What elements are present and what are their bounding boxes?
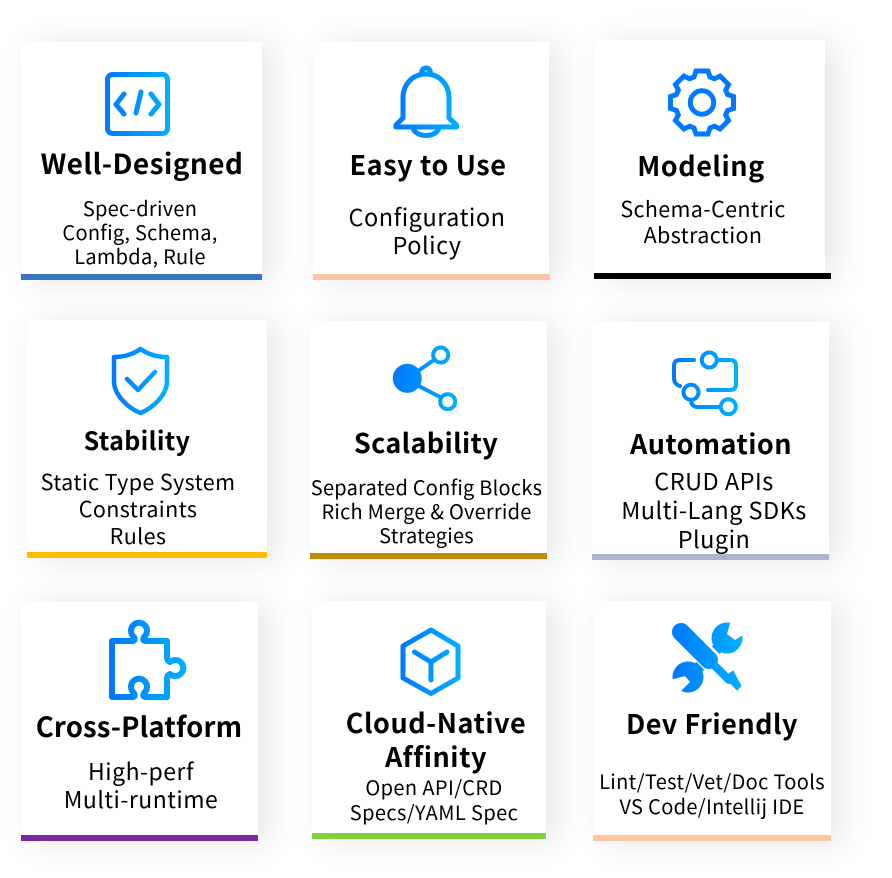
heading: Well-Designed	[41, 143, 243, 183]
panel: Scalability	[310, 321, 547, 559]
text block: Spec-driven	[83, 193, 197, 222]
text block: High-perf	[88, 753, 194, 787]
text block: Strategies	[379, 520, 474, 548]
text block: CRUD APIs	[654, 463, 774, 497]
text block: Lint/Test/Vet/Doc Tools	[599, 766, 825, 795]
accent bar	[313, 274, 550, 280]
heading	[346, 702, 526, 775]
icon: puzzle piece	[109, 620, 186, 700]
panel: Well-Designed	[21, 42, 262, 280]
accent bar	[310, 553, 547, 559]
text block	[350, 772, 518, 826]
text block	[62, 193, 218, 270]
heading: Easy to Use	[349, 144, 507, 183]
panel: Dev Friendly	[593, 601, 831, 841]
text block: Abstraction	[644, 219, 762, 250]
icon: gear	[668, 68, 736, 136]
accent bar	[593, 835, 831, 841]
text block	[64, 753, 218, 815]
text block: Static Type System	[41, 466, 235, 497]
icon: crossed tools	[672, 622, 742, 692]
panel: Easy to Use	[313, 42, 549, 280]
icon: bell	[394, 66, 459, 138]
text block: Rules	[110, 520, 166, 551]
heading: Stability	[84, 422, 190, 458]
heading: Scalability	[354, 422, 498, 461]
panel: Cross-Platform	[21, 602, 258, 841]
text block: Open API/CRD	[365, 772, 503, 801]
heading: Modeling	[637, 145, 765, 184]
text block: Multi-Lang SDKs	[621, 492, 807, 526]
icon: code brackets	[105, 72, 170, 136]
accent bar	[592, 554, 829, 560]
icon: shield with check	[112, 346, 170, 416]
heading: Dev Friendly	[626, 703, 798, 742]
text block: Plugin	[678, 521, 750, 555]
accent bar	[312, 833, 546, 839]
text block: Constraints	[79, 493, 197, 524]
heading: Cloud-Native	[346, 702, 526, 741]
text block: Configuration	[349, 199, 505, 233]
panel: Modeling	[594, 40, 825, 279]
text block: Policy	[392, 227, 462, 261]
accent bar	[594, 273, 831, 279]
text block	[620, 193, 786, 250]
icon: workflow nodes	[672, 350, 738, 416]
heading: Automation	[630, 423, 792, 462]
accent bar	[21, 274, 262, 280]
text block	[349, 199, 505, 261]
text block	[41, 466, 235, 551]
text block: Multi-runtime	[64, 781, 218, 815]
text block: Rich Merge & Override	[321, 496, 532, 524]
panel: Cloud-Native Affinity	[312, 601, 546, 839]
heading: Cross-Platform	[36, 705, 242, 745]
icon: share nodes	[392, 346, 458, 412]
text block: Lambda, Rule	[74, 241, 206, 270]
icon: hexagon cube	[400, 628, 460, 696]
text block: Separated Config Blocks	[311, 472, 542, 500]
text block	[621, 463, 807, 555]
accent bar	[27, 552, 267, 558]
text block: Schema-Centric	[620, 193, 786, 224]
text block	[599, 766, 825, 820]
text block	[311, 472, 542, 548]
panel: Automation	[592, 322, 829, 560]
text block: Specs/YAML Spec	[350, 797, 518, 826]
accent bar	[21, 835, 258, 841]
text block: VS Code/Intellij IDE	[619, 791, 805, 820]
text block: Config, Schema,	[62, 217, 218, 246]
heading: Affinity	[385, 736, 487, 775]
panel: Stability	[27, 320, 267, 558]
